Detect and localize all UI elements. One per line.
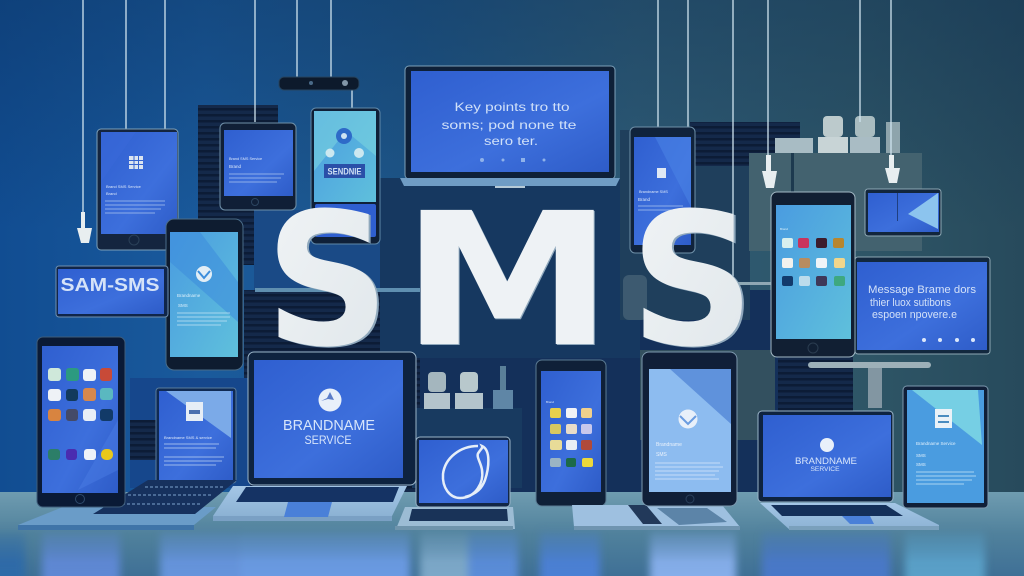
title: SMS: S <box>630 174 755 388</box>
table surface <box>0 492 1024 576</box>
sensor boxes right <box>775 116 900 153</box>
laptop: bottom left keyboard stand <box>18 388 237 530</box>
tablet: upper middle: Brand <box>229 164 242 169</box>
laptop: bottom right: BRANDNAME <box>795 456 857 466</box>
phone: right centre: Brandname SMS <box>639 190 668 194</box>
phone: right app grid: Brand <box>780 227 788 231</box>
laptop: bottom left keyboard stand: Brandname SMS & service <box>164 435 213 440</box>
screen text: Key points tro tto <box>454 100 570 114</box>
tablet: bottom right: Brandname Service <box>916 441 956 446</box>
tablet: upper left <box>97 129 178 250</box>
hanging black bar device <box>279 77 359 90</box>
app icons <box>550 408 593 467</box>
tablet: upper left: Brand SMS Service <box>106 184 142 189</box>
app icons <box>782 238 845 286</box>
background equipment racks <box>130 105 931 495</box>
laptop: small logo <box>395 437 515 530</box>
title: SMS: S <box>267 175 392 389</box>
title: SMS: S <box>632 175 757 389</box>
tablet: bottom centre: Brandname <box>656 442 682 448</box>
phone: left centre: Brandname <box>177 293 201 298</box>
title: SMS <box>265 173 757 389</box>
monitor: centre key points <box>400 66 620 188</box>
tablet: upper left: Brand <box>106 191 117 196</box>
phone: teal upper: SENDNIE <box>328 166 362 178</box>
phone: right centre <box>630 127 695 253</box>
phone: left centre <box>166 219 243 370</box>
title: SMS: S <box>265 174 390 388</box>
tablet: bottom centre: SMS <box>656 452 668 458</box>
app icons <box>48 368 113 460</box>
sign: SAM-SMS: SAM-SMS <box>60 274 160 295</box>
laptop: brandname service: SERVICE <box>304 435 352 447</box>
laptop: bottom right: SERVICE <box>810 466 840 473</box>
screen text <box>442 100 577 148</box>
screen text: soms; pod none tte <box>442 118 577 132</box>
sensor boxes center <box>424 366 513 409</box>
laptop: brandname service <box>213 352 416 521</box>
tablet: bottom centre <box>572 352 740 530</box>
phone: teal upper <box>311 108 380 244</box>
hanging cables <box>83 0 891 282</box>
tablet: bottom right: SMS <box>916 462 926 467</box>
phone: bottom centre app grid: Brand <box>546 400 554 404</box>
screen text: sero ter. <box>484 134 538 148</box>
monitor: right message: thier luox sutibons <box>870 297 951 309</box>
laptop: bottom right <box>758 411 939 530</box>
phone: left centre: SMS <box>178 303 188 308</box>
monitor: right message: espoen npovere.e <box>872 309 957 321</box>
phone: bottom centre app grid <box>536 360 606 506</box>
phone: bottom left app grid <box>37 337 125 507</box>
tablet: bottom right <box>903 386 988 508</box>
monitor: right message: Message Brame dors <box>868 284 977 296</box>
phone: right centre: Brand <box>638 197 651 202</box>
tablet: bottom right: SMS <box>916 453 926 458</box>
monitor: right message <box>855 257 990 354</box>
sign: SAM-SMS <box>56 266 168 317</box>
tablet: upper middle <box>220 123 296 210</box>
laptop: brandname service: BRANDNAME <box>283 418 375 434</box>
tablet: small upper right <box>865 189 941 236</box>
icon: cable plugs <box>77 155 900 243</box>
title: SMS: M <box>402 174 614 388</box>
phone: right app grid <box>771 192 855 357</box>
tablet: upper middle: Brand SMS Service <box>229 157 262 161</box>
title: SMS: M <box>401 173 613 387</box>
icon: leaf logo <box>443 446 488 498</box>
